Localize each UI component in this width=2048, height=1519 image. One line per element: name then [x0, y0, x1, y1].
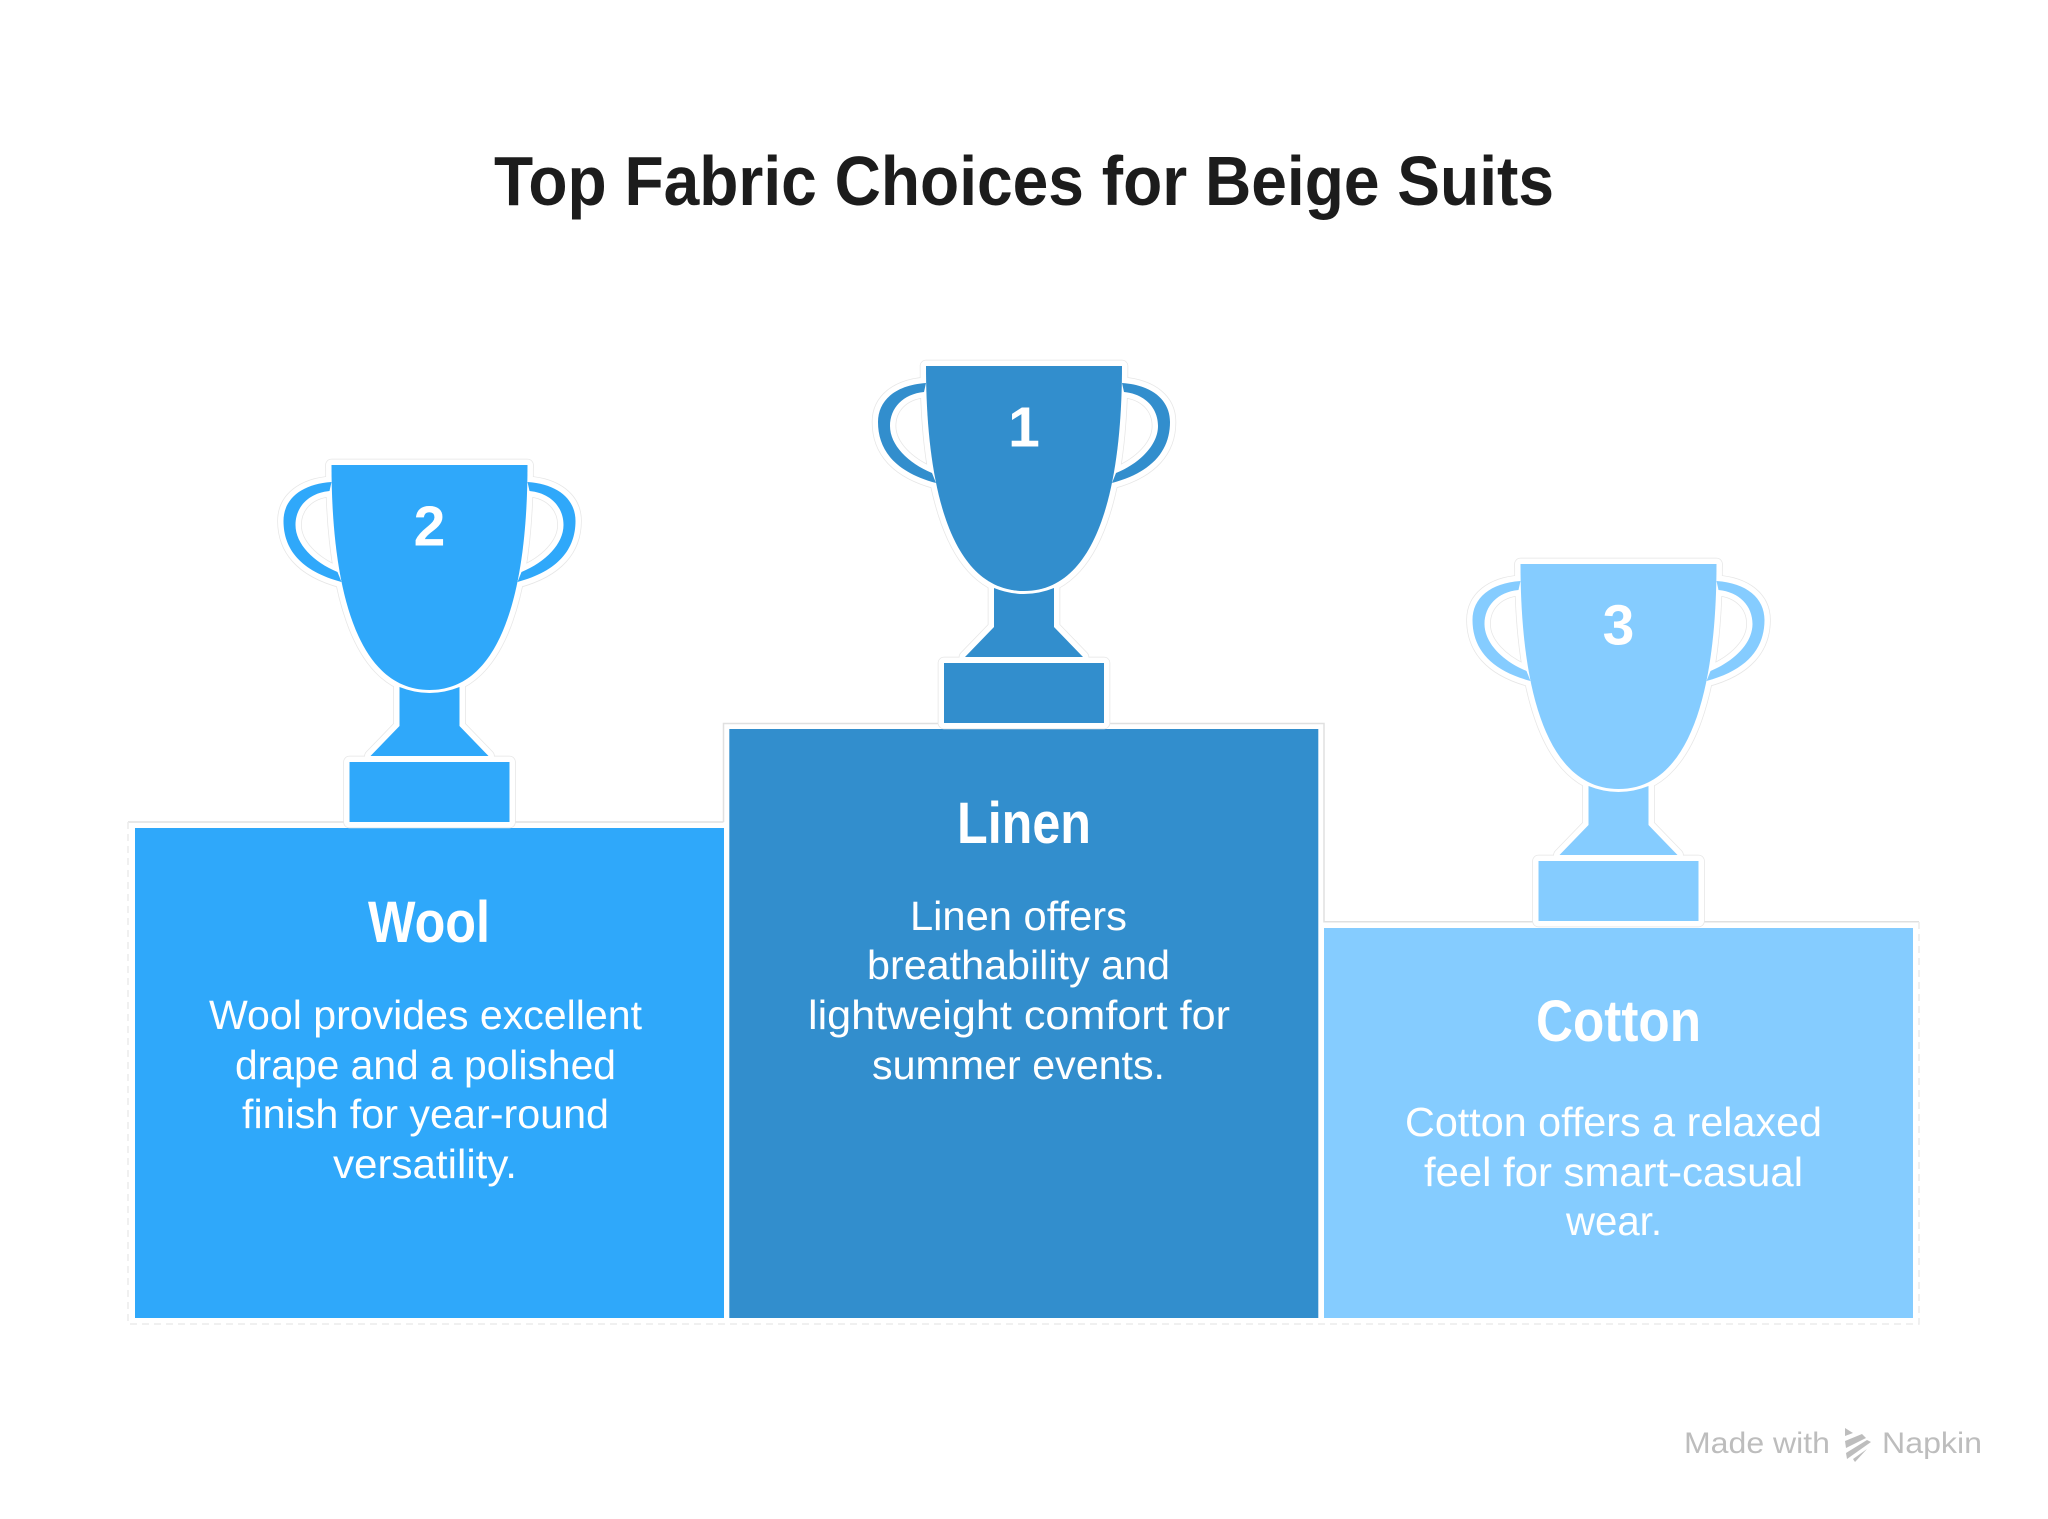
number 3: 3 [1603, 594, 1634, 658]
panel: linen [729, 729, 1318, 1318]
watermark: made with napkin [1684, 1427, 1982, 1462]
icon: trophy 2 [284, 465, 576, 822]
watermark: made with napkin: Made with [1684, 1427, 1830, 1460]
number 1: 1 [1008, 396, 1040, 460]
text: cotton description: feel for smart-casual [1424, 1149, 1803, 1195]
text: linen description [808, 893, 1230, 1088]
panel: cotton [1324, 928, 1913, 1318]
icon: trophy 3 [1472, 564, 1764, 921]
panel: wool [135, 828, 724, 1318]
text: linen description: breathability and [867, 942, 1170, 988]
icon: trophy 1 [878, 366, 1170, 723]
text: cotton description: Cotton offers a relaxed [1405, 1099, 1822, 1145]
heading: cotton: Cotton [1536, 989, 1701, 1054]
text: cotton description [1405, 1099, 1822, 1244]
text: linen description: Linen offers [910, 893, 1127, 939]
icon: napkin logo [1845, 1428, 1871, 1462]
title: Top Fabric Choices for Beige Suits [494, 142, 1554, 220]
watermark: made with napkin: Napkin [1882, 1427, 1982, 1460]
heading: linen: Linen [957, 791, 1091, 856]
text: wool description: finish for year-round [242, 1091, 609, 1137]
text: wool description: versatility. [333, 1141, 517, 1187]
heading: wool: Wool [368, 890, 490, 955]
text: cotton description: wear. [1565, 1198, 1662, 1244]
text: linen description: lightweight comfort for [808, 992, 1230, 1038]
text: wool description [209, 992, 643, 1187]
text: linen description: summer events. [872, 1042, 1165, 1088]
text: wool description: Wool provides excellent [209, 992, 643, 1038]
text: wool description: drape and a polished [235, 1042, 616, 1088]
number 2: 2 [414, 494, 445, 558]
